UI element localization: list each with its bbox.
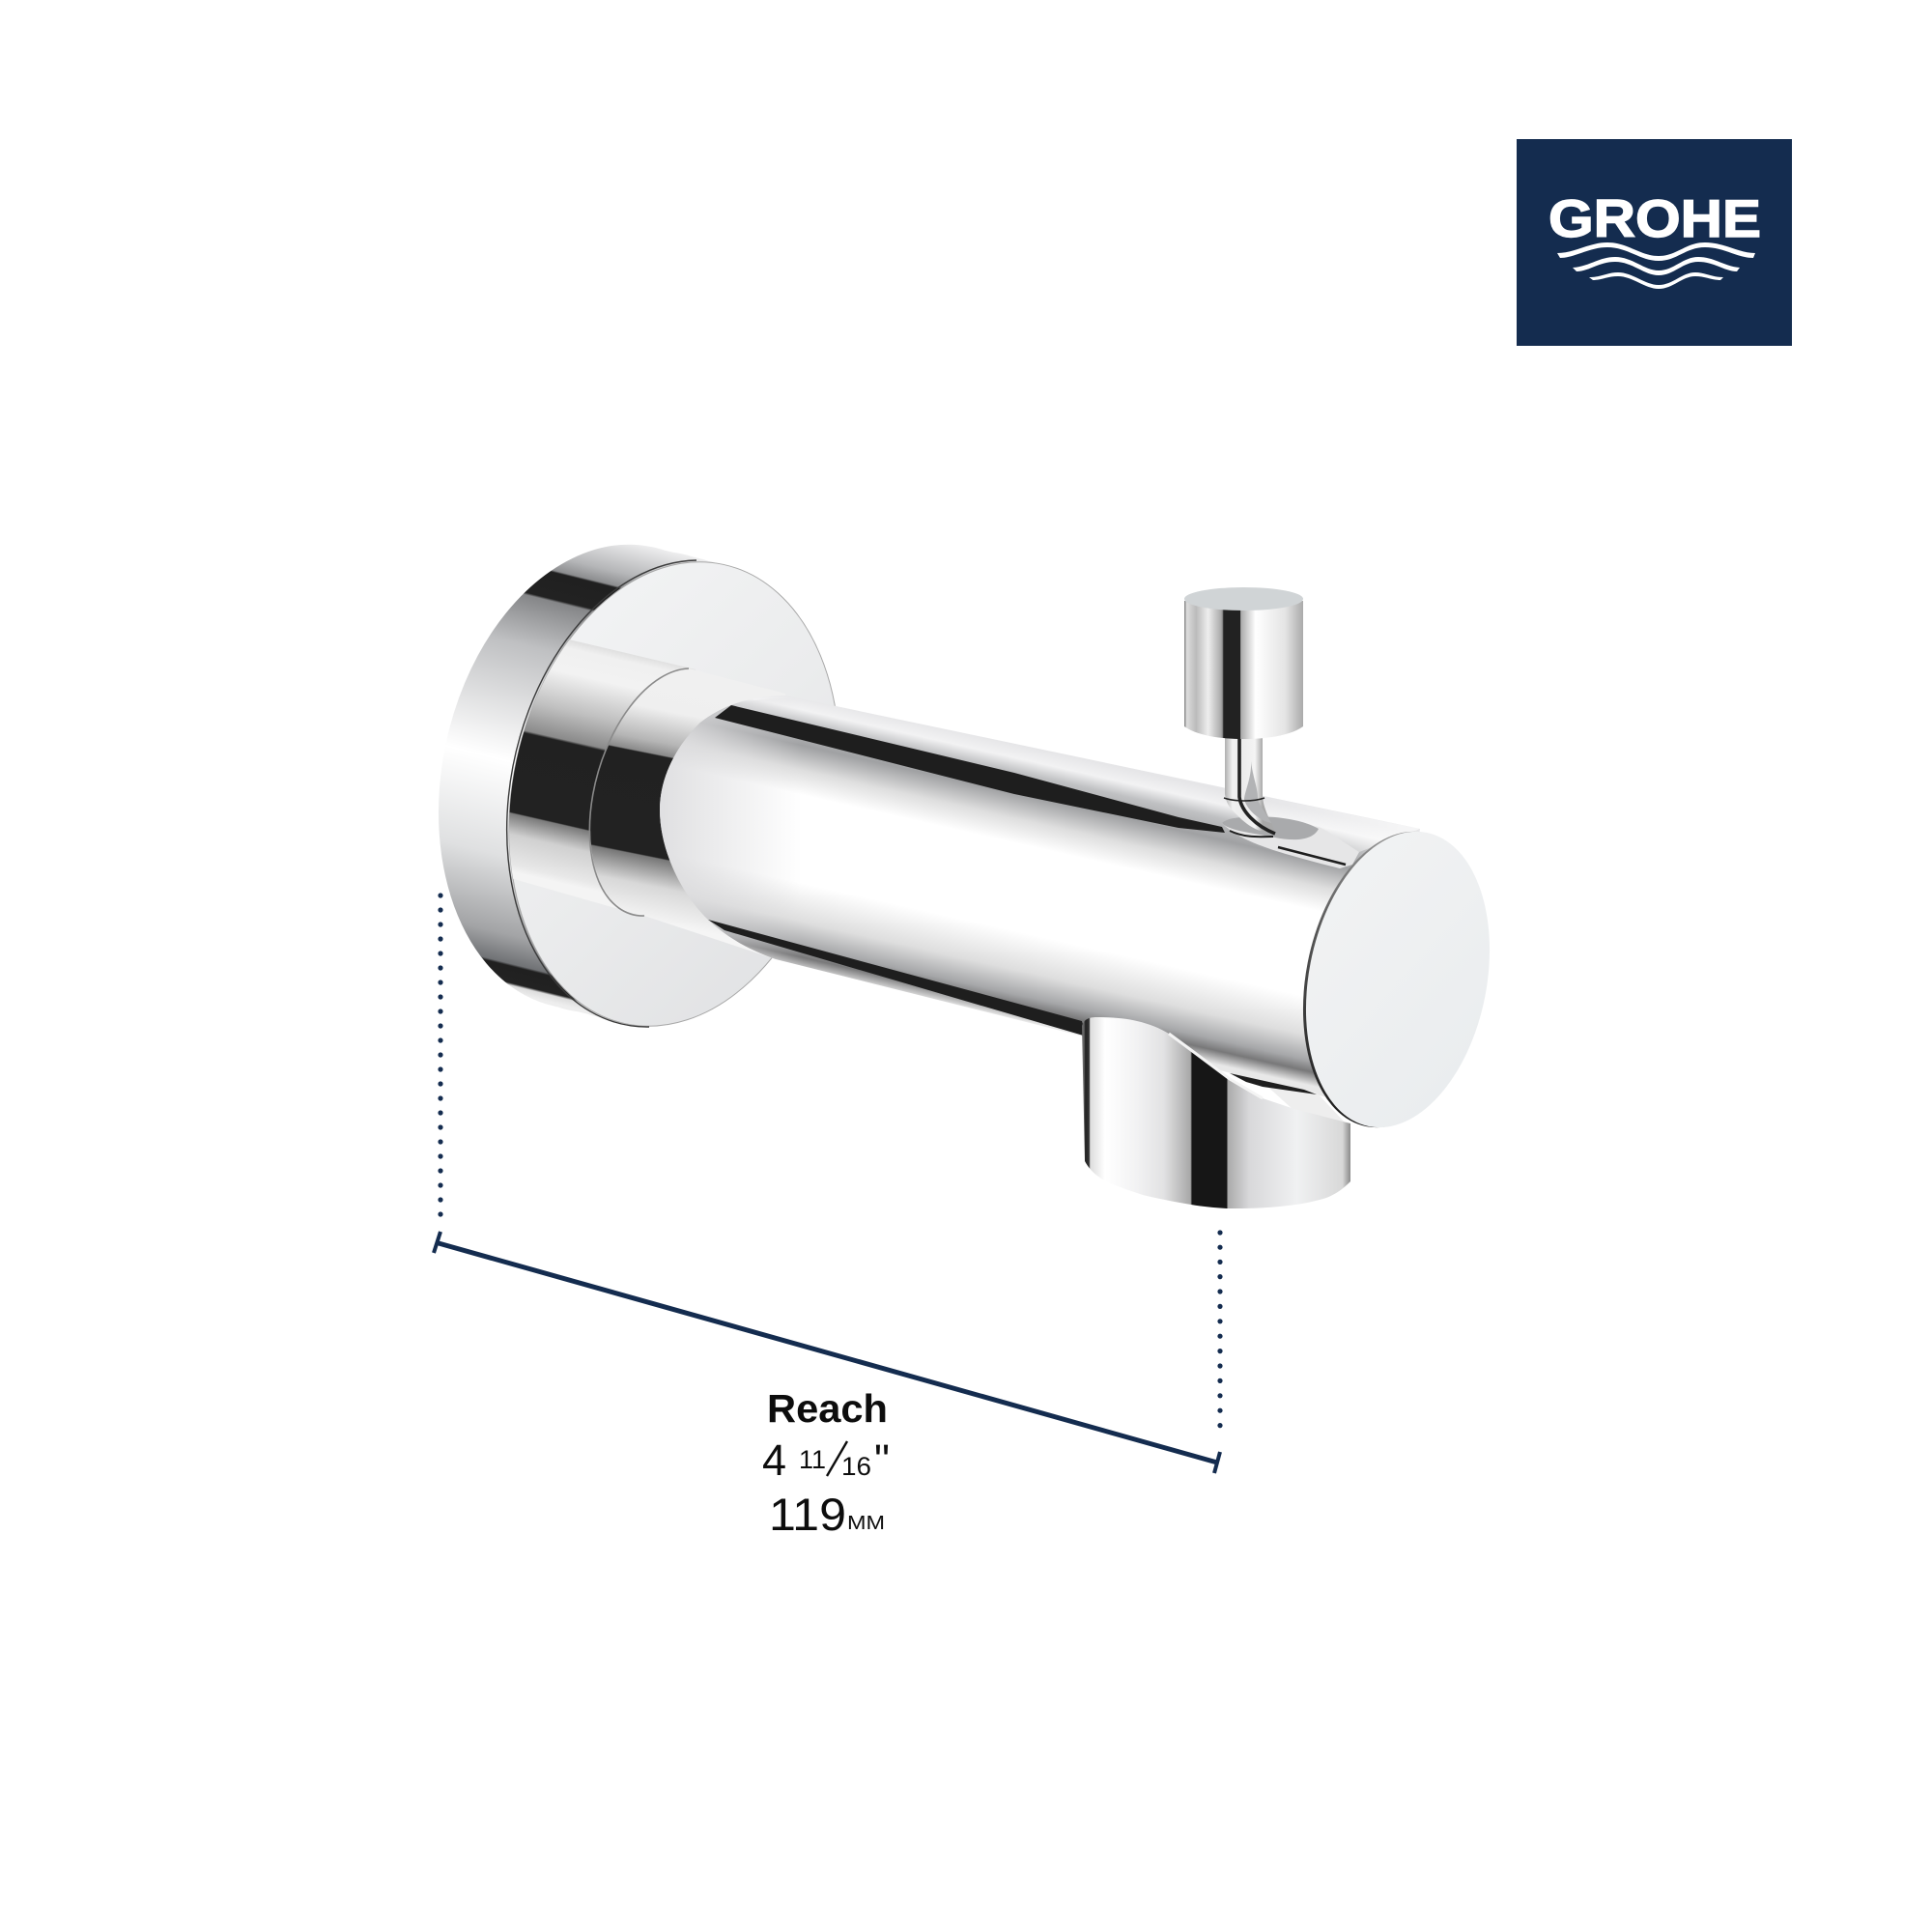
stem ring bbox=[1224, 798, 1264, 801]
tube top highlight fade bbox=[1265, 797, 1420, 852]
end cap bbox=[1282, 815, 1514, 1144]
spout underside lip bbox=[1263, 1082, 1348, 1125]
collar bbox=[590, 668, 773, 958]
inches value: 11 bbox=[799, 1445, 826, 1474]
spout outlet bbox=[1082, 1017, 1350, 1208]
stem dark line bbox=[1239, 734, 1275, 834]
saddle: grey oval bbox=[1222, 817, 1319, 839]
logo waves bbox=[1557, 242, 1755, 289]
wall plate: front face bbox=[468, 531, 881, 1057]
millimetres value: MM bbox=[847, 1513, 885, 1534]
knob body bbox=[1184, 601, 1303, 739]
tube left fade bbox=[660, 698, 802, 966]
end cap rim bbox=[1279, 815, 1511, 1144]
inches value: 16 bbox=[841, 1452, 871, 1481]
wall plate: side wall bbox=[439, 545, 713, 1018]
wall plate: rim line bbox=[507, 560, 696, 1027]
spout junction shadow bbox=[1230, 1073, 1317, 1094]
logo: GROHE bbox=[1517, 139, 1792, 346]
inches value: " bbox=[874, 1435, 890, 1485]
stem highlight bbox=[1244, 761, 1271, 823]
knob top bbox=[1184, 587, 1303, 611]
label heading: Reach bbox=[767, 1386, 888, 1431]
millimetres value: 119 bbox=[769, 1489, 846, 1540]
tube upper dark reflection bbox=[715, 705, 1225, 833]
millimetres value bbox=[769, 1489, 885, 1540]
wall plate: tube reflection bbox=[509, 639, 696, 915]
inches value: 4 bbox=[762, 1435, 786, 1485]
tube body bbox=[660, 696, 1420, 1111]
saddle: dark lines bbox=[1230, 831, 1346, 865]
dimension label bbox=[762, 1386, 890, 1540]
logo wordmark: GROHE bbox=[1548, 188, 1761, 248]
right dotted guide bbox=[1217, 1230, 1223, 1428]
dimension line bbox=[434, 1232, 1220, 1473]
saddle: light lens under stem bbox=[1222, 817, 1359, 868]
stem bbox=[1225, 734, 1274, 833]
tube lower dark reflection bbox=[708, 920, 1087, 1037]
inches value bbox=[762, 1435, 890, 1485]
product image: chrome tub spout bbox=[425, 522, 1514, 1208]
left dotted guide bbox=[438, 893, 443, 1217]
spout crease bbox=[1169, 1034, 1263, 1098]
collar ring line bbox=[589, 668, 689, 916]
